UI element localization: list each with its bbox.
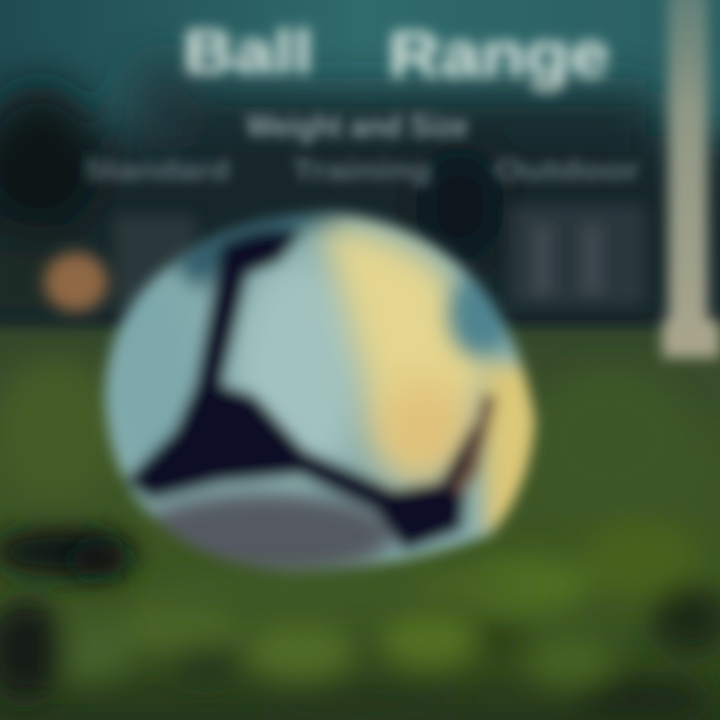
three captions: Standard [84, 154, 230, 187]
background: grass field [0, 328, 720, 720]
background: dark treeline [0, 60, 720, 340]
ball centre panel [238, 260, 362, 480]
three captions [84, 154, 640, 187]
goal post [662, 0, 720, 358]
three captions: Outdoor [494, 154, 640, 187]
icon: orange blob in background [44, 252, 108, 312]
ball yellow highlight [320, 225, 490, 480]
foreground grass [68, 544, 530, 608]
ball upper-right teal patch [448, 273, 512, 357]
ball far-right yellow panel [485, 365, 545, 535]
background: sky [0, 0, 720, 200]
three captions: Training [292, 154, 432, 187]
ball lower grey panel [135, 493, 395, 577]
soccer ball [90, 200, 550, 590]
ball top dark edge [170, 205, 350, 290]
title: Range [388, 17, 610, 91]
ball base [98, 205, 529, 576]
ball ochre lower area [380, 380, 470, 480]
ball black seams [125, 230, 475, 552]
title [183, 17, 610, 91]
title: Ball [183, 18, 313, 87]
ball left panel [105, 270, 195, 470]
grass texture [0, 360, 720, 720]
background: distant fence [115, 205, 645, 310]
subtitle: Weight and Size [246, 108, 468, 144]
ball brown seam [458, 395, 490, 492]
